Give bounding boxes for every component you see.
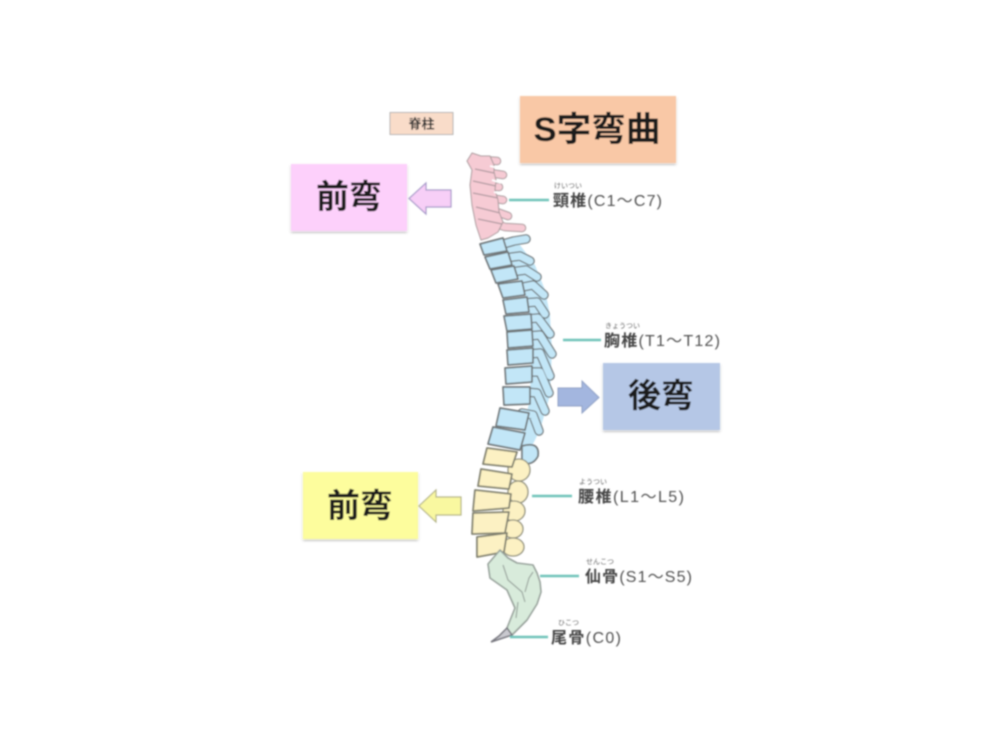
label: cervical: 頸椎(C1〜C7) [553,191,662,210]
label: spine: 脊柱 [408,116,435,132]
panel: thoracic kyphosis [603,363,720,430]
label: cervical [553,182,662,210]
arrow: thoracic kyphosis [558,381,599,413]
leader line: cervical [509,199,549,201]
label: lumbar [578,478,684,506]
label: sacrum: せんこつ [586,558,614,566]
label: thoracic [604,322,720,350]
label: coccyx: 尾骨(C0) [551,629,621,647]
panel: cervical lordosis: 前弯 [316,178,382,215]
spine illustration [467,153,552,642]
label: thoracic: 胸椎(T1〜T12) [604,331,720,350]
leader line: coccyx [510,636,548,638]
label: sacrum: 仙骨(S1〜S5) [585,568,692,586]
label: lumbar: 腰椎(L1〜L5) [578,487,684,506]
arrow: cervical lordosis [409,183,451,214]
label: coccyx: ひこつ [558,619,579,627]
thoracic vertebrae [480,238,552,464]
panel: thoracic kyphosis: 後弯 [628,377,694,414]
heading: S-curve: S字弯曲 [534,111,660,149]
label: lumbar: ようつい [579,478,607,486]
label: cervical: けいつい [554,182,582,190]
panel: lumbar lordosis [303,472,418,539]
leader line: sacrum [540,575,579,577]
heading: S-curve [520,96,676,163]
lumbar vertebrae [472,448,530,557]
leader line: thoracic [563,339,601,341]
label: sacrum [585,558,692,586]
panel: cervical lordosis [291,164,407,231]
arrow: lumbar lordosis [419,490,461,522]
panel: lumbar lordosis: 前弯 [327,487,393,524]
label: coccyx [551,619,621,647]
cervical vertebrae [467,153,522,240]
sacrum and coccyx [488,550,541,642]
label: spine [390,112,453,134]
leader line: lumbar [532,495,572,497]
label: thoracic: きょうつい [605,322,640,330]
